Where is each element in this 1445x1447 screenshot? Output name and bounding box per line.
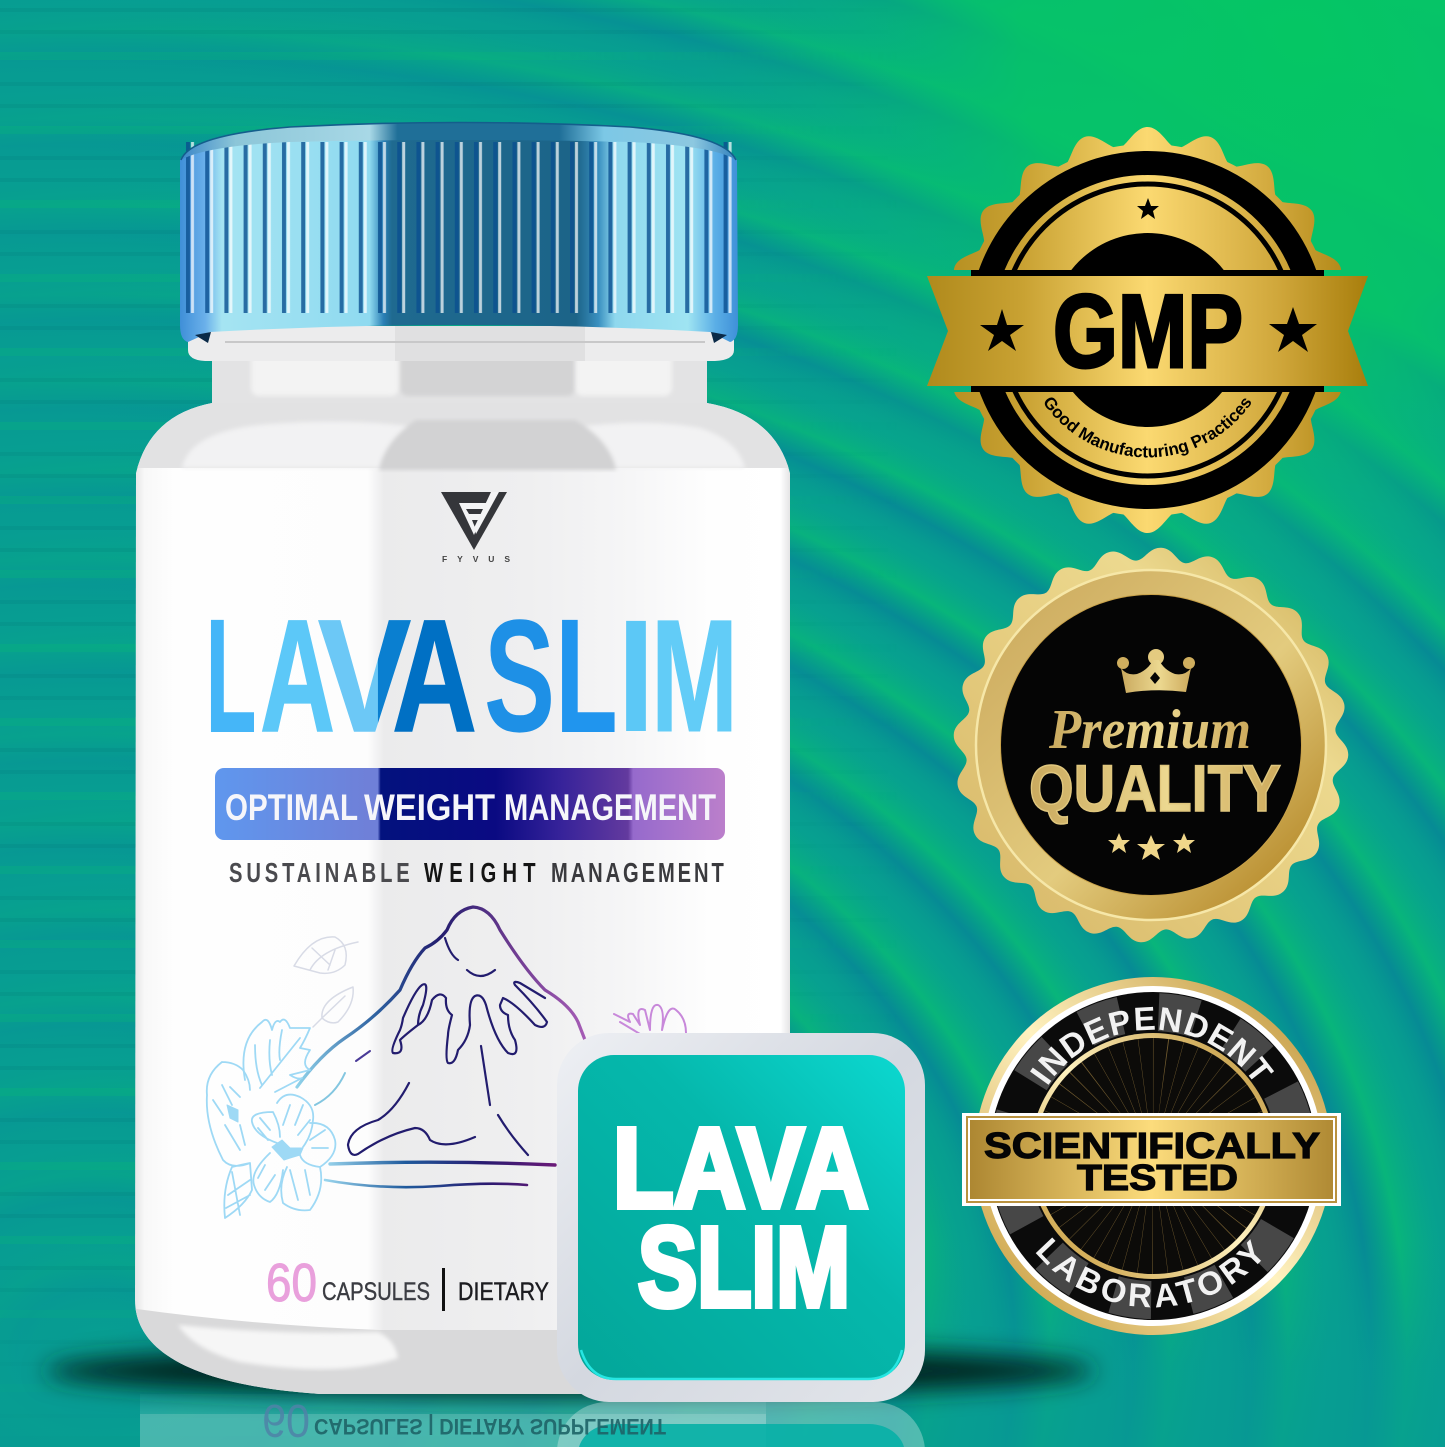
product name: LAVASLIM: A — [392, 586, 477, 765]
falling leaves — [294, 937, 358, 973]
Scientifically Tested seal: SCIENTIFICALLY — [984, 1125, 1320, 1166]
GMP lettering: GMP — [1053, 274, 1243, 390]
60 capsules label — [266, 1253, 549, 1313]
bottle shoulder and base shading — [130, 400, 800, 1400]
tagline — [229, 858, 724, 889]
product name: LAVASLIM: A — [260, 586, 335, 765]
60 capsules label: 60 — [266, 1253, 317, 1313]
LAVA SLIM teal square capsule box: SLIM — [638, 1204, 850, 1330]
GMP seal — [927, 127, 1368, 533]
tagline: WEIGHT — [424, 858, 536, 889]
Premium Quality seal — [950, 545, 1352, 947]
fern leaf — [243, 1020, 310, 1092]
product name: LAVASLIM: S — [484, 586, 555, 765]
product name: LAVASLIM — [206, 586, 738, 765]
LAVA SLIM teal square capsule box — [557, 1033, 925, 1402]
product name: LAVASLIM: V — [318, 586, 411, 765]
Scientifically Tested seal — [962, 977, 1341, 1335]
tagline: SUSTAINABLE — [229, 858, 410, 889]
black concentric rings — [980, 163, 1314, 497]
mountain outline — [297, 907, 585, 1087]
purple banner — [215, 768, 725, 840]
product name: LAVASLIM: L — [556, 586, 617, 765]
INDEPENDENT curved text: INDEPENDENT — [1030, 1006, 1274, 1085]
purple banner: OPTIMAL — [225, 787, 358, 828]
gold banner — [962, 1113, 1341, 1206]
brand logo: FYVUS: FYVUS — [442, 554, 510, 564]
LABORATORY curved text: LABORATORY — [1036, 1238, 1261, 1308]
lava drips — [348, 938, 547, 1155]
Premium Quality seal: QUALITY — [1029, 751, 1281, 825]
bottle and box reflection: CAPSULES | DIETARY SUPPLEMENT — [314, 1414, 667, 1439]
floor shadow — [45, 1345, 1095, 1397]
LAVA SLIM teal square capsule box: LAVA — [613, 1105, 868, 1231]
Premium Quality seal: Premium — [1048, 699, 1251, 761]
blue ribbed cap — [180, 122, 738, 343]
three stars — [1108, 833, 1195, 860]
brand logo: FYVUS — [441, 492, 510, 564]
curved text: Good Manufacturing Practices — [1044, 398, 1251, 458]
Scientifically Tested seal: TESTED — [1077, 1157, 1238, 1198]
tagline: MANAGEMENT — [551, 858, 724, 889]
ground lines — [330, 1162, 555, 1165]
sunburst rays — [1093, 1096, 1213, 1216]
product bottle — [130, 122, 800, 1400]
neck ring — [188, 326, 734, 361]
stars — [980, 198, 1317, 352]
60 capsules label: DIETARY — [458, 1278, 549, 1306]
gold ribbon — [927, 276, 1368, 386]
product name: LAVASLIM: M — [651, 586, 738, 765]
pink fern — [614, 1005, 686, 1034]
bottle and box reflection — [140, 1394, 925, 1447]
mountain illustration — [207, 907, 686, 1218]
bottle body — [135, 403, 790, 1394]
bottle and box reflection: 60 — [262, 1395, 310, 1447]
purple banner: WEIGHT — [364, 787, 495, 828]
60 capsules label: CAPSULES — [322, 1278, 430, 1306]
bottle neck — [212, 352, 707, 415]
purple banner: MANAGEMENT — [504, 787, 716, 828]
crown icon — [1117, 649, 1195, 693]
gold scalloped edge — [954, 127, 1342, 533]
product name: LAVASLIM: L — [206, 586, 256, 765]
product name: LAVASLIM: I — [617, 586, 655, 765]
hibiscus flowers — [207, 1062, 335, 1218]
